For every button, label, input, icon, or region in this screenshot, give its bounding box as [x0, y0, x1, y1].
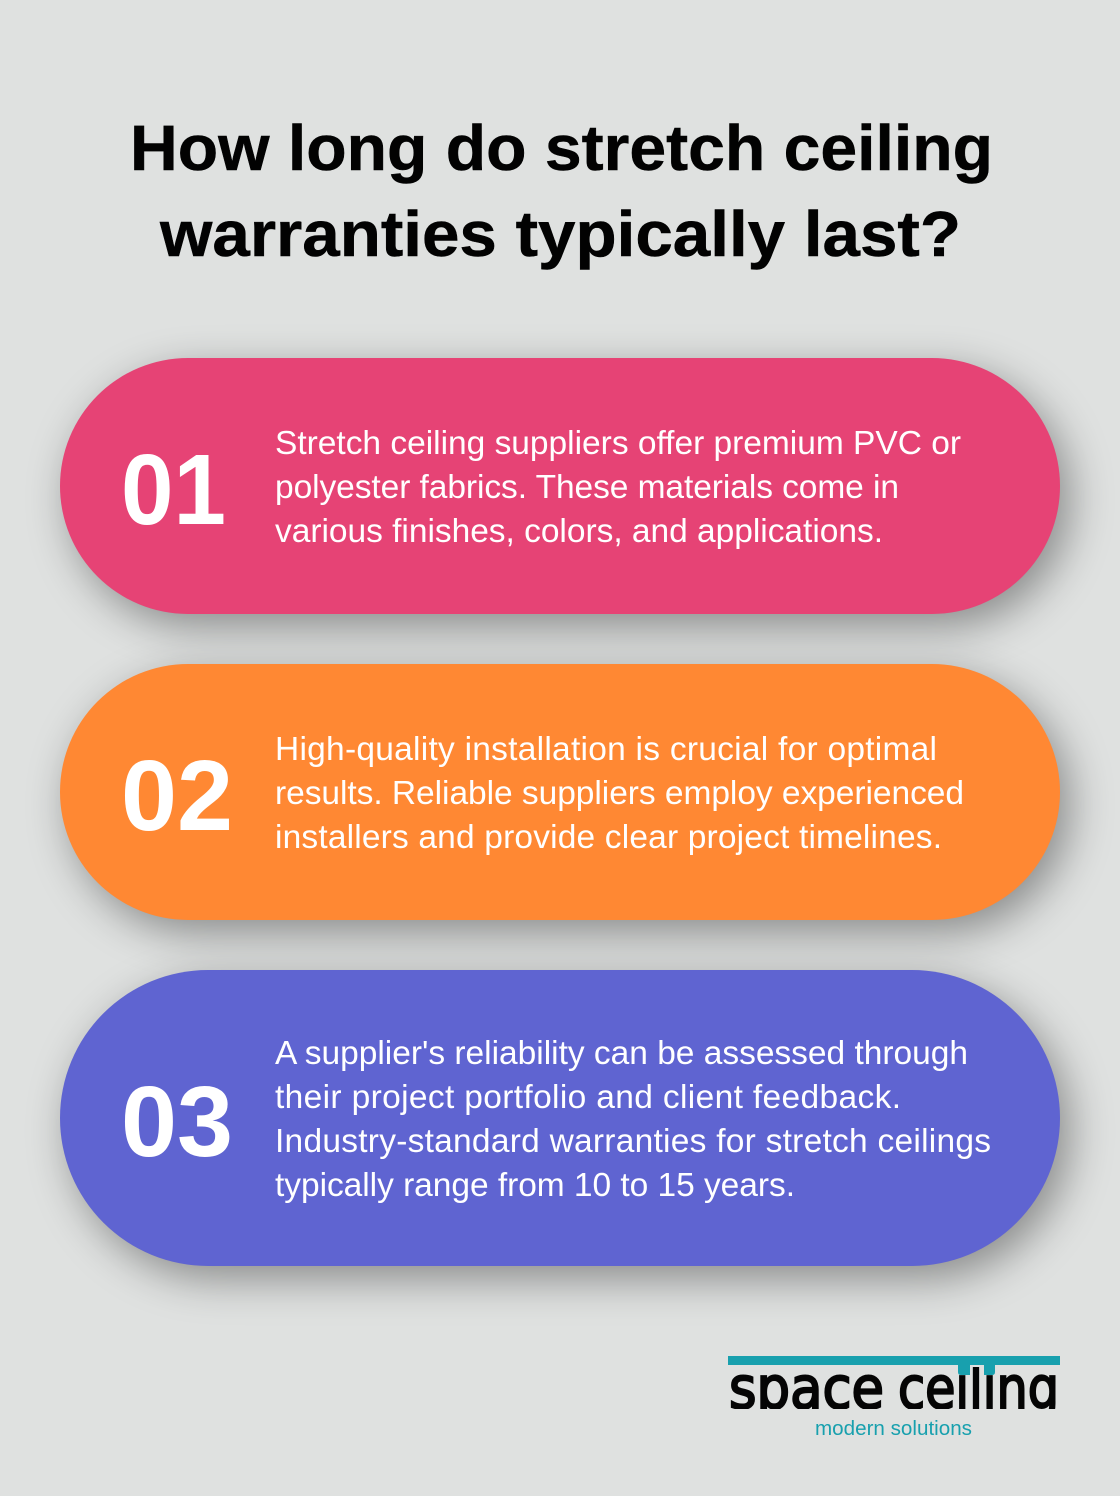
- text block: step 01 description: various finishes, colors, and applications.: [275, 513, 883, 550]
- text block: step 01 description: polyester fabrics. These materials come in: [275, 469, 899, 506]
- panel: step 02: [60, 664, 1060, 920]
- logo wordmark: ceiling: [898, 1354, 1059, 1422]
- title: How long do stretch ceiling: [130, 112, 993, 184]
- panel: step 01: [60, 358, 1060, 614]
- logo bar: [728, 1356, 1060, 1375]
- text block: step 02 description: installers and provide clear project timelines.: [275, 819, 942, 856]
- text block: step 03 description: [275, 1035, 991, 1204]
- title: warranties typically last?: [159, 198, 961, 270]
- text block: step 03 description: A supplier's reliability can be assessed through: [275, 1035, 968, 1072]
- number 01: 01: [121, 434, 226, 546]
- title: [130, 112, 993, 270]
- logo wordmark: [730, 1367, 1056, 1409]
- text block: step 03 description: Industry-standard warranties for stretch ceilings: [275, 1123, 991, 1160]
- logo tagline: modern solutions: [815, 1418, 972, 1440]
- text block: step 02 description: High-quality installation is crucial for optimal: [275, 731, 937, 768]
- text block: step 02 description: [275, 731, 964, 856]
- text block: step 03 description: typically range from 10 to 15 years.: [275, 1167, 795, 1204]
- text block: step 01 description: Stretch ceiling suppliers offer premium PVC or: [275, 425, 961, 462]
- text block: step 03 description: their project portfolio and client feedback.: [275, 1079, 901, 1116]
- text block: step 01 description: [275, 425, 961, 550]
- text block: step 02 description: results. Reliable suppliers employ experienced: [275, 775, 964, 812]
- panel: step 03: [60, 970, 1060, 1266]
- number 02: 02: [121, 740, 233, 852]
- number 03: 03: [121, 1066, 233, 1178]
- logo wordmark: space: [729, 1354, 884, 1422]
- logo: Space Ceiling: [728, 1356, 1060, 1440]
